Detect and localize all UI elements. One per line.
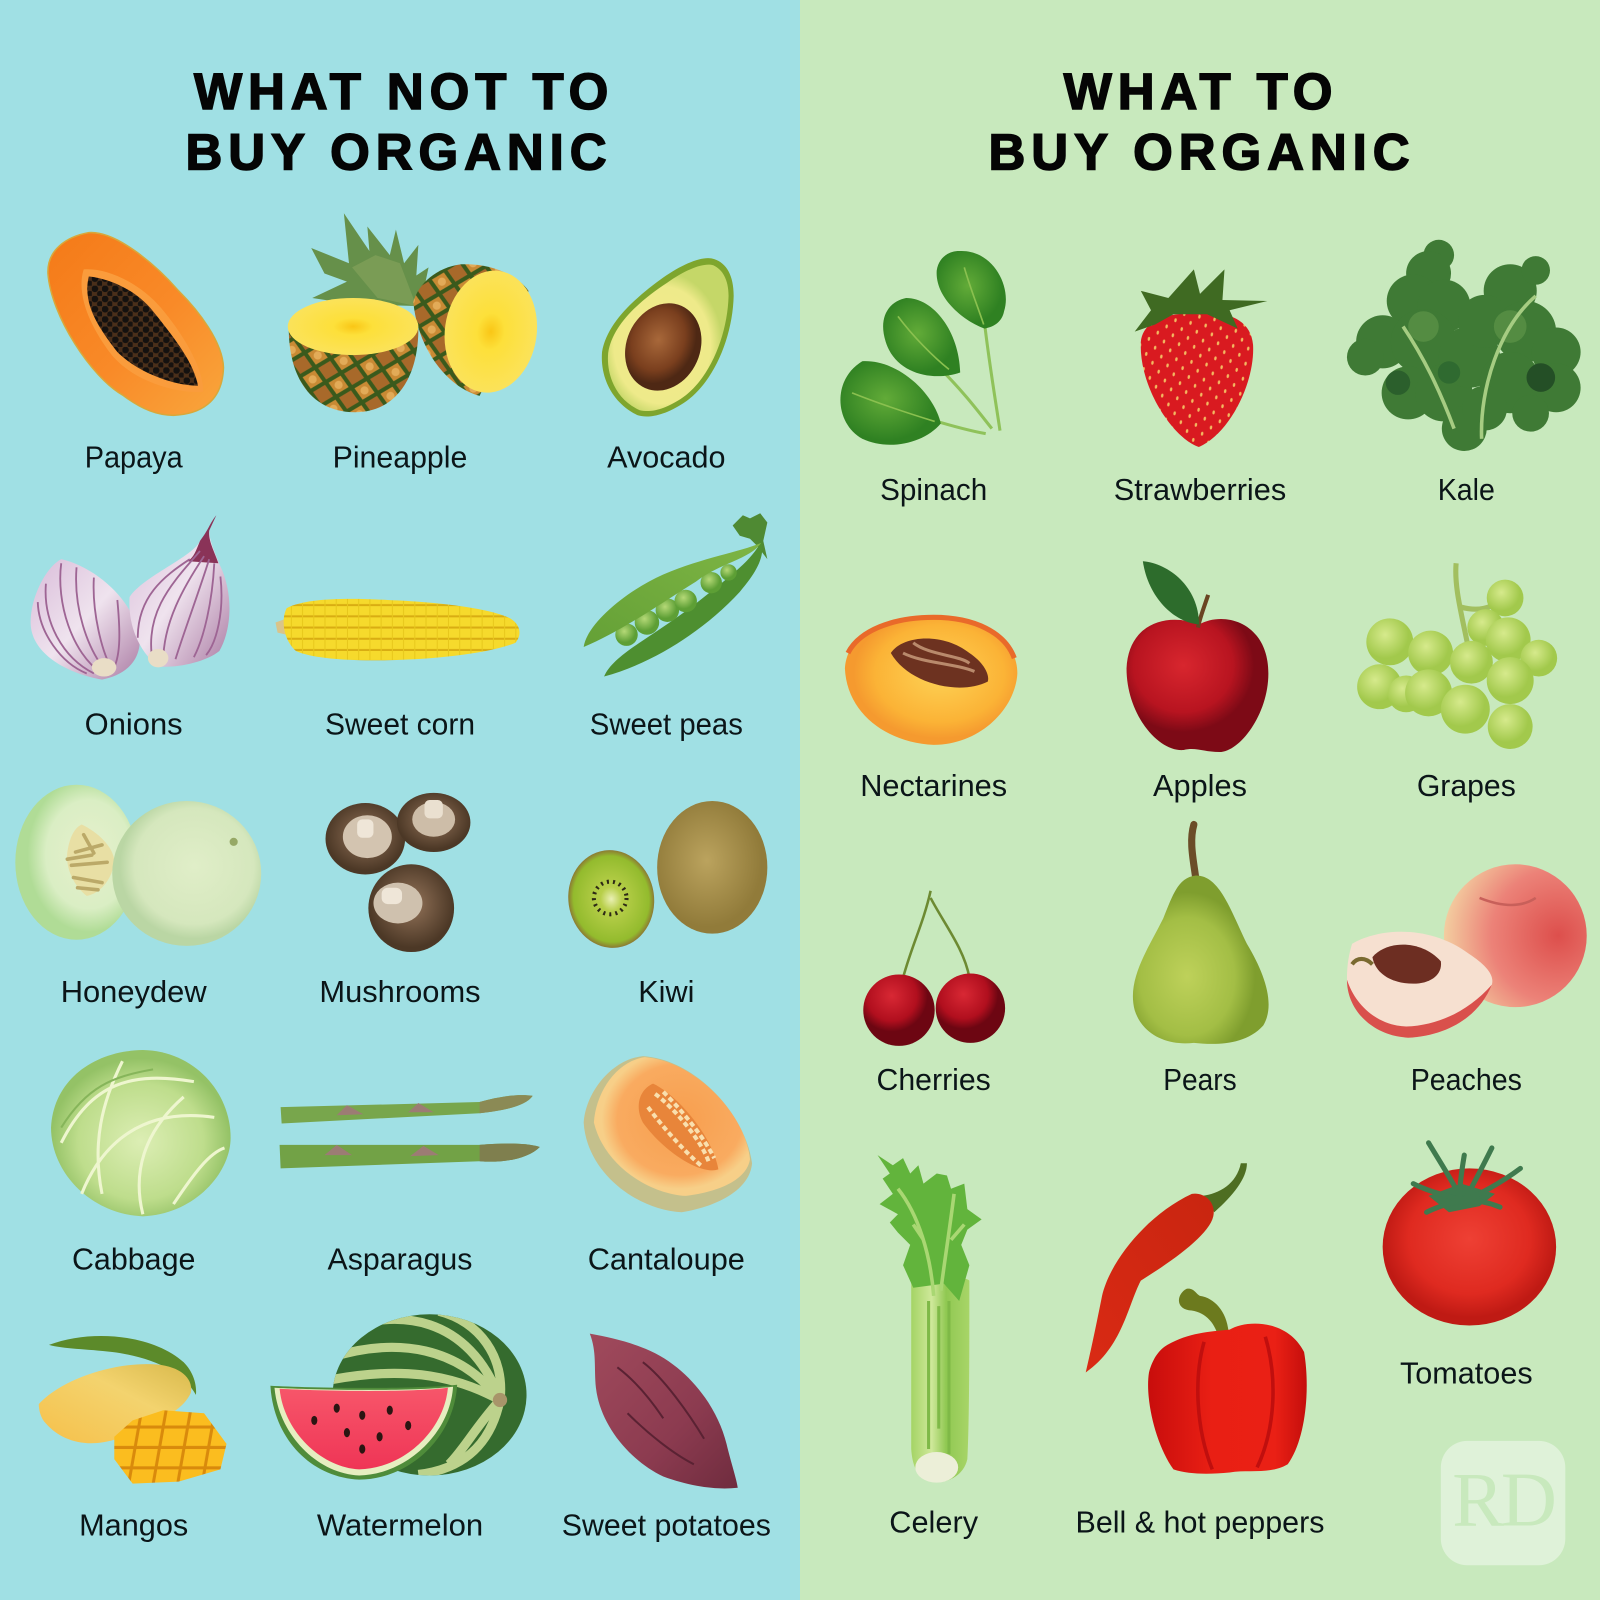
heading: what to buy organic: WHAT TO	[1064, 63, 1338, 120]
label: Strawberries	[1114, 473, 1286, 507]
panel: what not to buy organic	[15, 72, 770, 1542]
item: peaches	[1347, 864, 1587, 1097]
item: tomatoes	[1383, 1143, 1556, 1391]
label: Nectarines	[860, 769, 1007, 803]
label: Cherries	[877, 1063, 991, 1097]
item: asparagus	[280, 1095, 540, 1276]
label: Cantaloupe	[588, 1242, 745, 1276]
label: Peaches	[1411, 1063, 1522, 1097]
label: Onions	[85, 708, 183, 742]
label: Apples	[1153, 769, 1247, 803]
item: cantaloupe	[584, 1056, 752, 1276]
item: cherries	[863, 891, 1005, 1097]
label: Tomatoes	[1400, 1357, 1533, 1391]
item: grapes	[1357, 563, 1557, 803]
item: mushrooms	[319, 793, 481, 1009]
label: Cabbage	[72, 1242, 195, 1276]
item: pineapple	[288, 213, 545, 474]
item: kale	[1347, 240, 1581, 507]
label: Mushrooms	[319, 975, 481, 1009]
label: Watermelon	[317, 1509, 483, 1543]
panel: what to buy organic	[800, 0, 1600, 1600]
label: Kiwi	[638, 975, 694, 1009]
item: papaya	[48, 233, 223, 474]
label: Pears	[1163, 1063, 1237, 1097]
label: Avocado	[607, 440, 726, 474]
item: pears	[1133, 824, 1269, 1097]
logo: RD watermark: RD	[1452, 1457, 1554, 1543]
item: mangos	[39, 1336, 227, 1543]
item: strawberries	[1114, 269, 1286, 507]
label: Sweet corn	[325, 708, 475, 742]
item: kiwi	[562, 801, 767, 1009]
heading: what not to buy organic: WHAT NOT TO	[194, 63, 614, 120]
item: onions	[31, 515, 229, 742]
bell pepper	[1148, 1289, 1307, 1474]
label: Honeydew	[61, 975, 208, 1009]
item: avocado	[602, 258, 734, 474]
label: Grapes	[1417, 769, 1516, 803]
item: honeydew	[15, 785, 261, 1009]
item: bell and hot peppers	[1076, 1163, 1324, 1540]
item: watermelon	[270, 1311, 527, 1543]
logo: RD watermark	[1441, 1441, 1565, 1565]
heading: what to buy organic: BUY ORGANIC	[989, 123, 1416, 180]
label: Bell & hot peppers	[1076, 1506, 1324, 1540]
item: celery	[878, 1155, 982, 1540]
label: Papaya	[85, 440, 184, 474]
heading: what not to buy organic: BUY ORGANIC	[185, 123, 612, 180]
label: Mangos	[79, 1509, 188, 1543]
label: Spinach	[880, 473, 987, 507]
label: Sweet peas	[590, 708, 743, 742]
label: Sweet potatoes	[562, 1509, 771, 1543]
item: sweet potatoes	[562, 1334, 771, 1543]
item: sweet corn	[276, 599, 520, 742]
label: Celery	[889, 1506, 979, 1540]
label: Pineapple	[333, 440, 467, 474]
item: cabbage	[51, 1050, 231, 1276]
hot chili pepper	[1086, 1163, 1247, 1372]
label: Asparagus	[328, 1242, 472, 1276]
item: sweet peas	[584, 513, 767, 742]
item: spinach	[840, 251, 1006, 507]
item: apples	[1127, 561, 1268, 803]
label: Kale	[1438, 473, 1495, 507]
item: nectarines	[845, 615, 1017, 803]
